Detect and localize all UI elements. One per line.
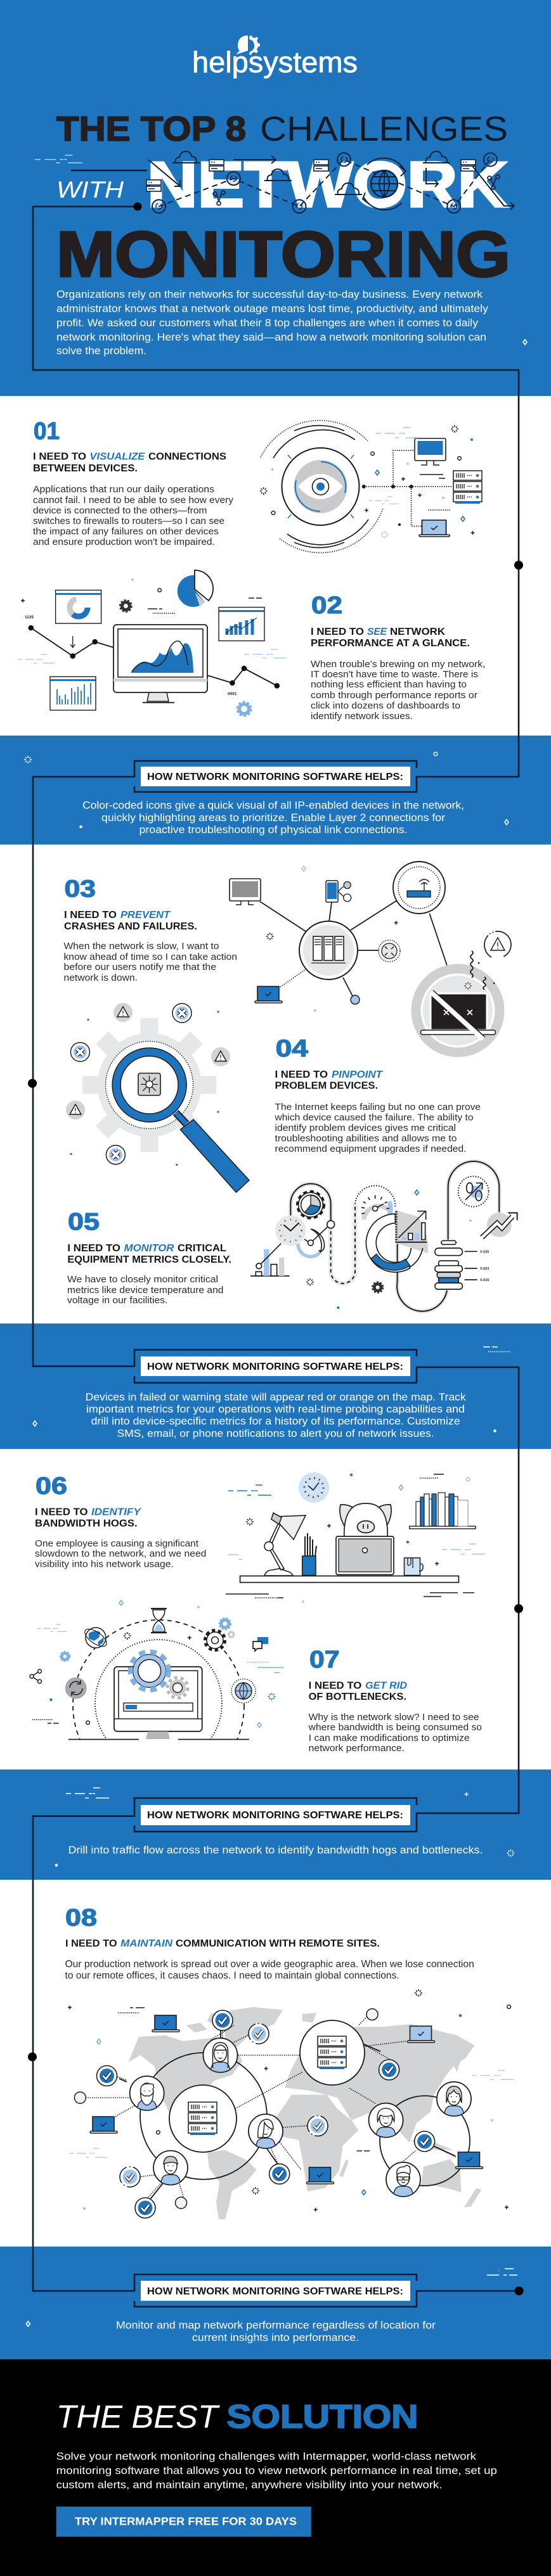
icon: router bbox=[393, 862, 445, 914]
icon: ring gauge bbox=[298, 1221, 335, 1256]
panel: challenge 01: device is connected to the others—from bbox=[33, 506, 207, 516]
panel: challenge 07: I can make modifications to optimize bbox=[309, 1733, 470, 1744]
server circle: right bbox=[300, 2020, 365, 2085]
callout: how software helps 4: current insights into performance. bbox=[192, 2331, 359, 2343]
panel: challenge 06: One employee is causing a significant bbox=[35, 1538, 199, 1549]
icon: phone bbox=[326, 881, 351, 902]
icon: chat bubbles bbox=[253, 1637, 268, 1651]
connector line through the page bbox=[28, 170, 524, 2307]
illustration: eye and network devices bbox=[260, 421, 482, 552]
desk bbox=[240, 1576, 458, 1583]
person: curly hair bbox=[369, 2103, 403, 2138]
callout: how software helps 4 bbox=[116, 2281, 436, 2343]
illustration: bottleneck monitor and dashed arch bbox=[29, 1599, 284, 1740]
panel: challenge 08: 08 bbox=[65, 1904, 97, 1931]
panel: challenge 07: where bandwidth is being consumed so bbox=[308, 1722, 482, 1733]
icon: pie chart bbox=[178, 570, 213, 607]
panel: challenge 07: GET RID bbox=[365, 1680, 407, 1692]
callout: how software helps 1: HOW NETWORK MONITORING SOFTWARE HELPS: bbox=[147, 772, 403, 782]
panel: challenge 05: voltage in our facilities. bbox=[67, 1295, 167, 1306]
callout: how software helps 1: Color-coded icons give a quick visual of all IP-enabled devices in the network, bbox=[82, 800, 464, 811]
panel: challenge 05: CRITICAL bbox=[178, 1243, 226, 1254]
panel: challenge 03: network is down. bbox=[63, 972, 138, 983]
person: woman with side hair bbox=[249, 2114, 283, 2148]
panel: challenge 02: 02 bbox=[311, 592, 342, 619]
callout: how software helps 3: Drill into traffic flow across the network to identify bandwidth hogs and bottlenecks. bbox=[68, 1844, 483, 1856]
icon: gears bbox=[205, 1618, 234, 1650]
icon: donut chart with growth arrow bbox=[366, 1210, 428, 1272]
icon: hourglass bbox=[151, 1609, 167, 1633]
icon: monitor with gears and progress bar bbox=[114, 1652, 202, 1739]
callout: how software helps 2: Devices in failed or warning state will appear red or orange on the map. Track bbox=[86, 1391, 466, 1403]
callout: how software helps 1: quickly highlighting areas to prioritize. Enable Layer 2 connections for bbox=[101, 812, 445, 824]
panel: challenge 02: identify network issues. bbox=[311, 711, 413, 722]
icon: stacked discs with readings bbox=[435, 1240, 477, 1289]
heading: the best solution: SOLUTION bbox=[227, 2399, 418, 2435]
panel: challenge 03: CRASHES AND FAILURES. bbox=[64, 921, 197, 932]
panel: challenge 04: I NEED TO bbox=[275, 1069, 328, 1080]
icon: bar dashboard window bbox=[219, 607, 264, 641]
panel: challenge 05: EQUIPMENT METRICS CLOSELY. bbox=[67, 1254, 231, 1265]
heading: the best solution: THE BEST bbox=[56, 2399, 221, 2435]
panel: challenge 01: the impact of any failures on other devices bbox=[33, 526, 219, 537]
icon: donut dashboard window bbox=[56, 590, 101, 623]
icon: mug bbox=[405, 1558, 423, 1575]
panel: challenge 06: visibility into his network usage. bbox=[35, 1559, 174, 1570]
panel: challenge 08: I NEED TO bbox=[65, 1939, 117, 1949]
callout: how software helps 4: Monitor and map network performance regardless of location for bbox=[116, 2319, 436, 2331]
panel: challenge 04: troubleshooting abilities and allows me to bbox=[275, 1133, 457, 1144]
callout: how software helps 1: proactive troubleshooting of physical link connections. bbox=[139, 824, 407, 836]
title line 1 bbox=[56, 109, 508, 148]
panel: challenge 06: 06 bbox=[36, 1473, 67, 1500]
callout: how software helps 2 bbox=[86, 1356, 466, 1439]
panel: challenge 01: switches to firewalls to routers—so I can see bbox=[33, 516, 224, 526]
title word: network: NETWORK bbox=[147, 150, 508, 220]
panel: challenge 03: know ahead of time so I can take action bbox=[63, 952, 237, 962]
panel: challenge 07: Why is the network slow? I need to see bbox=[309, 1712, 479, 1723]
callout: how software helps 2: HOW NETWORK MONITORING SOFTWARE HELPS: bbox=[147, 1361, 403, 1372]
network line art overlay bbox=[146, 151, 514, 213]
panel: challenge 03: 03 bbox=[65, 876, 96, 903]
icon: network switch bbox=[138, 1073, 160, 1095]
panel: challenge 02: click into dozens of dashboards to bbox=[311, 701, 460, 711]
intro paragraph: network monitoring. Here's what they said—and how a network monitoring solution can bbox=[56, 331, 486, 343]
intro paragraph bbox=[56, 288, 489, 357]
panel: challenge 04: PINPOINT bbox=[332, 1069, 384, 1080]
status check badges bbox=[96, 2010, 435, 2218]
person: smiling man bbox=[153, 2151, 188, 2185]
icon: wall clock bbox=[299, 1472, 329, 1503]
intro paragraph: solve the problem. bbox=[56, 345, 146, 357]
icon: pig bbox=[340, 1503, 391, 1540]
person: woman top bbox=[203, 2038, 237, 2072]
person: woman smiling bbox=[437, 2082, 471, 2116]
illustration: world map with connected people and servers bbox=[68, 1989, 514, 2219]
icon: pencil cup bbox=[302, 1533, 316, 1575]
panel: challenge 03: PREVENT bbox=[120, 910, 171, 921]
intro paragraph: profit. We asked our customers what their 8 top challenges are when it comes to daily bbox=[56, 317, 479, 329]
button: try intermapper: TRY INTERMAPPER FREE FOR 30 DAYS bbox=[75, 2515, 297, 2527]
panel: challenge 01: 01 bbox=[34, 418, 60, 445]
panel: challenge 03: When the network is slow, I want to bbox=[63, 941, 219, 952]
title line 1: CHALLENGES bbox=[260, 109, 508, 148]
illustration: magnifier over gear bbox=[66, 1003, 249, 1192]
icon: speech bubble and gear bbox=[236, 35, 260, 55]
panel: challenge 01: Applications that run our daily operations bbox=[33, 484, 214, 495]
callout: how software helps 2: SMS, email, or phone notifications to alert you of network issues. bbox=[117, 1427, 434, 1439]
panel: challenge 03: before our users notify me that the bbox=[63, 962, 216, 972]
panel: challenge 02: When trouble's brewing on my network, bbox=[311, 659, 486, 670]
panel: challenge 08: MAINTAIN bbox=[120, 1939, 173, 1949]
panel: challenge 01: BETWEEN DEVICES. bbox=[33, 463, 138, 474]
panel: challenge 06: BANDWIDTH HOGS. bbox=[35, 1518, 138, 1529]
panel: challenge 06: I NEED TO bbox=[35, 1507, 88, 1518]
empty status circles bbox=[74, 2009, 378, 2209]
title line 1: THE TOP 8 bbox=[56, 109, 246, 148]
icon: crashed laptop bbox=[416, 969, 500, 1052]
intro paragraph: administrator knows that a network outage means lost time, productivity, and ultimately bbox=[56, 303, 489, 314]
logo: helpsystems: helpsystems bbox=[192, 46, 358, 79]
button: try intermapper bbox=[56, 2506, 311, 2537]
illustration: dashboards and monitor chart bbox=[18, 570, 287, 716]
panel: challenge 01: VISUALIZE bbox=[89, 451, 145, 462]
panel: challenge 04: The Internet keeps failing but no one can prove bbox=[275, 1102, 481, 1113]
illustration: dashboards and monitor chart: 0001 bbox=[228, 692, 237, 696]
panel: challenge 06: IDENTIFY bbox=[91, 1507, 141, 1518]
icon: percent bbox=[458, 1176, 489, 1207]
icon: laptop bbox=[419, 520, 450, 537]
icon: bookshelf bbox=[410, 1493, 476, 1529]
icon: desktop monitor bbox=[415, 438, 446, 465]
panel: challenge 02: NETWORK bbox=[390, 627, 446, 637]
panel: challenge 08: COMMUNICATION WITH REMOTE SITES. bbox=[176, 1939, 380, 1949]
icon: sync circle bbox=[65, 1678, 87, 1699]
panel: challenge 04 bbox=[274, 1036, 481, 1154]
world map bbox=[128, 2007, 481, 2219]
server circle: left bbox=[169, 2085, 237, 2152]
panel: challenge 04: identify problem devices gives me critical bbox=[275, 1123, 456, 1133]
panel: challenge 02: I NEED TO bbox=[311, 627, 364, 637]
panel: challenge 07: OF BOTTLENECKS. bbox=[309, 1692, 406, 1702]
callout: how software helps 4: HOW NETWORK MONITORING SOFTWARE HELPS: bbox=[147, 2286, 403, 2297]
icon: warning speech bubble bbox=[484, 931, 511, 961]
callout: how software helps 2: drill into device-specific metrics for a history of its performance. Customize bbox=[91, 1415, 460, 1427]
illustration: equipment metrics pipeline: 0.015 bbox=[480, 1278, 489, 1282]
heading: the best solution bbox=[56, 2399, 418, 2435]
icon: monitor bbox=[230, 879, 261, 905]
panel: challenge 05: We have to closely monitor critical bbox=[67, 1274, 218, 1285]
panel: challenge 01: CONNECTIONS bbox=[148, 451, 226, 462]
title dashes bbox=[35, 155, 82, 163]
panel: challenge 02: IT doesn't have time to waste. There is bbox=[311, 669, 478, 680]
illustration: dashboards and monitor chart: 1125 bbox=[25, 615, 34, 620]
panel: challenge 08: Our production network is spread out over a wide geographic area. When we lose connection bbox=[65, 1959, 474, 1970]
panel: challenge 01: and ensure production won't be impaired. bbox=[33, 537, 215, 547]
title word: monitoring: MONITORING bbox=[56, 219, 510, 290]
icon: share bbox=[30, 1669, 42, 1683]
panel: challenge 05: 05 bbox=[68, 1209, 100, 1235]
panel: challenge 08 bbox=[65, 1904, 474, 1981]
panel: challenge 08: to our remote offices, it causes chaos. I need to maintain global connections. bbox=[65, 1970, 399, 1981]
panel: challenge 06: slowdown to the network, and we need bbox=[35, 1548, 206, 1559]
panel: challenge 07 bbox=[308, 1647, 482, 1754]
icon: dotted globe bbox=[231, 1679, 256, 1703]
panel: challenge 02: PERFORMANCE AT A GLANCE. bbox=[311, 638, 470, 649]
solution paragraph: Solve your network monitoring challenges with Intermapper, world-class network bbox=[56, 2451, 477, 2462]
title word: with: WITH bbox=[56, 177, 124, 203]
icon: histogram dashboard window bbox=[50, 677, 96, 710]
panel: challenge 07: I NEED TO bbox=[309, 1680, 361, 1692]
network rings and links bbox=[86, 2012, 470, 2199]
panel: challenge 05: I NEED TO bbox=[67, 1243, 120, 1254]
icon: gear with pie bbox=[297, 1192, 324, 1218]
icon: server stack bbox=[453, 471, 482, 504]
icon: large monitor with area chart bbox=[113, 625, 207, 703]
solution paragraph bbox=[56, 2451, 497, 2491]
panel: challenge 05: MONITOR bbox=[124, 1243, 174, 1254]
panel: challenge 02: SEE bbox=[367, 627, 387, 637]
icon: trend arrow bbox=[482, 1212, 518, 1237]
icon: laptop lid bbox=[336, 1536, 394, 1575]
panel: challenge 06 bbox=[35, 1473, 206, 1570]
intro paragraph: Organizations rely on their networks for successful day-to-day business. Every network bbox=[56, 288, 483, 300]
panel: challenge 07: network performance. bbox=[309, 1743, 405, 1754]
icon: central server hub bbox=[299, 921, 358, 979]
panel: challenge 05 bbox=[67, 1209, 231, 1306]
icon: clock bbox=[275, 1215, 306, 1246]
icon: orbit globe bbox=[82, 1626, 110, 1650]
icon: speedometer bbox=[361, 1196, 391, 1220]
callout: how software helps 1 bbox=[82, 767, 464, 836]
panel: challenge 04: which device caused the failure. The ability to bbox=[274, 1113, 473, 1123]
panel: challenge 02: comb through performance reports or bbox=[311, 690, 477, 701]
solution paragraph: custom alerts, and maintain anytime, anywhere visibility into your network. bbox=[56, 2478, 442, 2491]
callout: how software helps 2: important metrics for your operations with real-time probing capabilities and bbox=[86, 1403, 465, 1415]
illustration: equipment metrics pipeline: 0.023 bbox=[480, 1267, 489, 1271]
panel: challenge 04: PROBLEM DEVICES. bbox=[275, 1081, 378, 1092]
panel: challenge 03: I NEED TO bbox=[64, 910, 117, 921]
panel: challenge 04: 04 bbox=[276, 1036, 308, 1062]
person: man with glasses bbox=[386, 2162, 420, 2197]
laptops bbox=[90, 2015, 483, 2184]
illustration: equipment metrics pipeline: 0.025 bbox=[480, 1250, 489, 1254]
illustration: network hub with failed laptop bbox=[230, 862, 511, 1052]
illustration: equipment metrics pipeline bbox=[250, 1161, 518, 1311]
panel: challenge 02 bbox=[311, 592, 486, 722]
person: bearded man bbox=[130, 2076, 164, 2110]
icon: desk lamp bbox=[264, 1513, 306, 1576]
panel: challenge 01: I NEED TO bbox=[33, 451, 86, 462]
panel: challenge 01: cannot fail. I need to be able to see how every bbox=[33, 495, 234, 506]
panel: challenge 02: nothing less efficient than having to bbox=[311, 679, 467, 690]
illustration: bandwidth hog at desk bbox=[226, 1472, 485, 1603]
callout: how software helps 3: HOW NETWORK MONITORING SOFTWARE HELPS: bbox=[147, 1810, 403, 1821]
panel: challenge 01 bbox=[33, 418, 234, 547]
panel: challenge 05: metrics like device temperature and bbox=[67, 1285, 223, 1296]
solution paragraph: monitoring software that allows you to view network performance in real time, set up bbox=[56, 2464, 497, 2477]
panel: challenge 04: recommend equipment upgrades if needed. bbox=[275, 1144, 467, 1154]
panel: challenge 07: 07 bbox=[309, 1647, 340, 1673]
callout: how software helps 3 bbox=[68, 1805, 483, 1856]
bar chart icon bbox=[250, 1244, 290, 1276]
panel: challenge 03 bbox=[63, 876, 237, 983]
